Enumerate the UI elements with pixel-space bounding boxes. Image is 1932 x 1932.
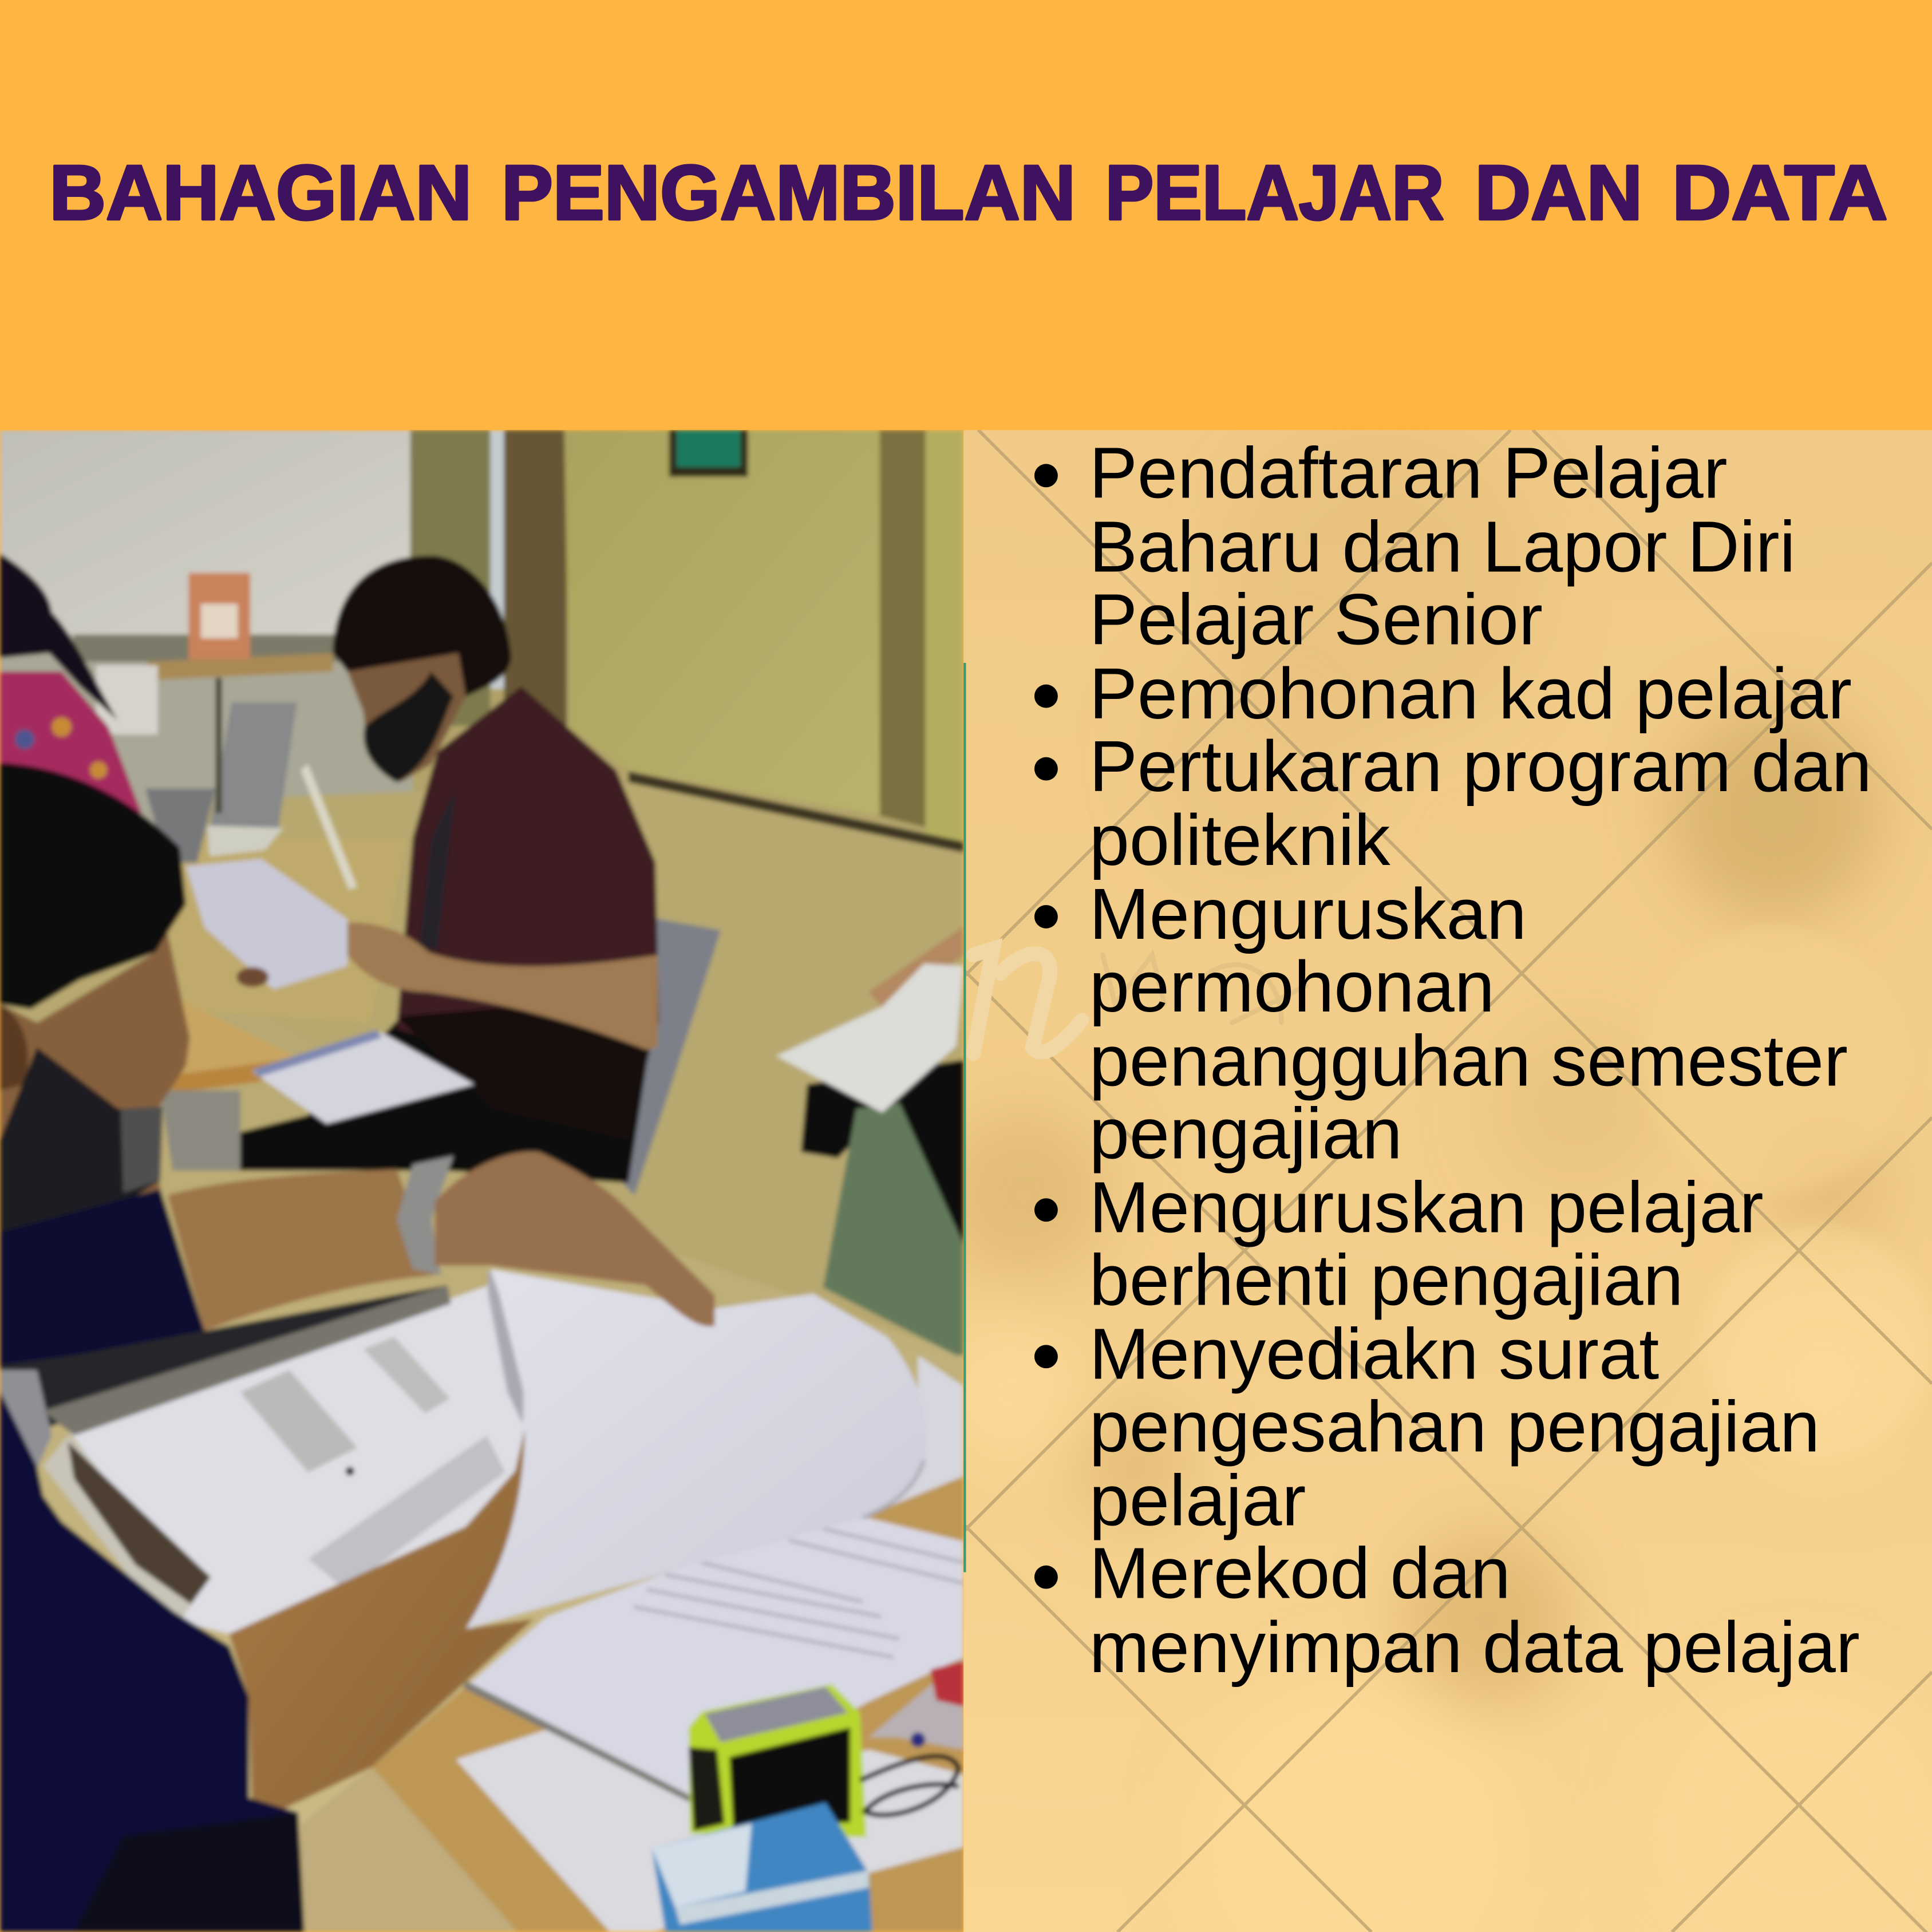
- wall picture frame: [669, 430, 748, 477]
- item: semester deferment: [1034, 874, 1848, 1174]
- front desk top: [296, 1356, 963, 1932]
- item: record data: menyimpan data pelajar: [1089, 1607, 1860, 1688]
- item: new student registration: Baharu dan Lapor Diri: [1089, 507, 1796, 587]
- item: withdrawal: [1034, 1167, 1764, 1320]
- item: semester deferment: permohonan: [1089, 946, 1495, 1027]
- panel: photo of staff checking documents: [0, 430, 963, 1932]
- item: confirmation letter: pelajar: [1089, 1460, 1306, 1541]
- papers and desk behind front man: [160, 859, 475, 1171]
- title: DAN: [1475, 149, 1642, 236]
- item: new student registration: Pendaftaran Pelajar: [1089, 433, 1728, 513]
- background furniture: [96, 573, 357, 890]
- item: confirmation letter: pengesahan pengajian: [1089, 1386, 1820, 1467]
- item: semester deferment: Menguruskan: [1089, 874, 1527, 954]
- open document on the desk: [456, 1511, 963, 1932]
- title: PENGAMBILAN: [501, 149, 1076, 236]
- front man's head with mask: [0, 762, 189, 1300]
- front man's forearm and wristwatch: [0, 1156, 453, 1374]
- item: programme exchange: [1034, 726, 1872, 880]
- seated man in maroon shirt: [234, 556, 721, 1195]
- binder with printed tables: [0, 1269, 527, 1634]
- front man's hand: [435, 1152, 714, 1326]
- title: BAHAGIAN: [49, 149, 472, 236]
- lighter bokeh circles: [1641, 927, 1932, 1460]
- right side person with paper and green bag: [776, 927, 963, 1356]
- self-inking stamp: [689, 1684, 866, 1837]
- item: new student registration: [1034, 433, 1796, 660]
- title: DATA: [1672, 149, 1888, 236]
- item: withdrawal: berhenti pengajian: [1089, 1239, 1684, 1320]
- item: confirmation letter: [1034, 1314, 1820, 1541]
- thin green edge line: [963, 663, 966, 1572]
- background woman in pink: [0, 553, 142, 813]
- item: programme exchange: politeknik: [1089, 800, 1390, 880]
- item: record data: Merekod dan: [1089, 1533, 1511, 1614]
- item: semester deferment: penangguhan semester: [1089, 1020, 1848, 1101]
- bulleted list of duties: [1034, 433, 1872, 1688]
- item: withdrawal: Menguruskan pelajar: [1089, 1167, 1764, 1247]
- item: student card: Pemohonan kad pelajar: [1089, 653, 1852, 734]
- item: semester deferment: pengajian: [1089, 1093, 1402, 1174]
- box of paper clips: [652, 1803, 872, 1932]
- item: programme exchange: Pertukaran program dan: [1089, 726, 1872, 807]
- title: PELAJAR: [1105, 149, 1444, 236]
- item: confirmation letter: Menyediakn surat: [1089, 1314, 1659, 1394]
- header band: [0, 0, 1932, 430]
- item: new student registration: Pelajar Senior: [1089, 579, 1543, 660]
- panel: textured gold background: [937, 419, 1932, 1932]
- navy shirt: [0, 1391, 305, 1932]
- item: record data: [1034, 1533, 1860, 1688]
- diamond lattice: [963, 430, 1932, 1932]
- cables and pens: [860, 1657, 963, 1815]
- room background: [0, 430, 963, 1932]
- lower forearm: [229, 1428, 534, 1824]
- turned page: [466, 1269, 926, 1629]
- soft bokeh shading: [937, 419, 1932, 1932]
- script watermark: [973, 949, 1306, 1053]
- title: [49, 149, 1888, 236]
